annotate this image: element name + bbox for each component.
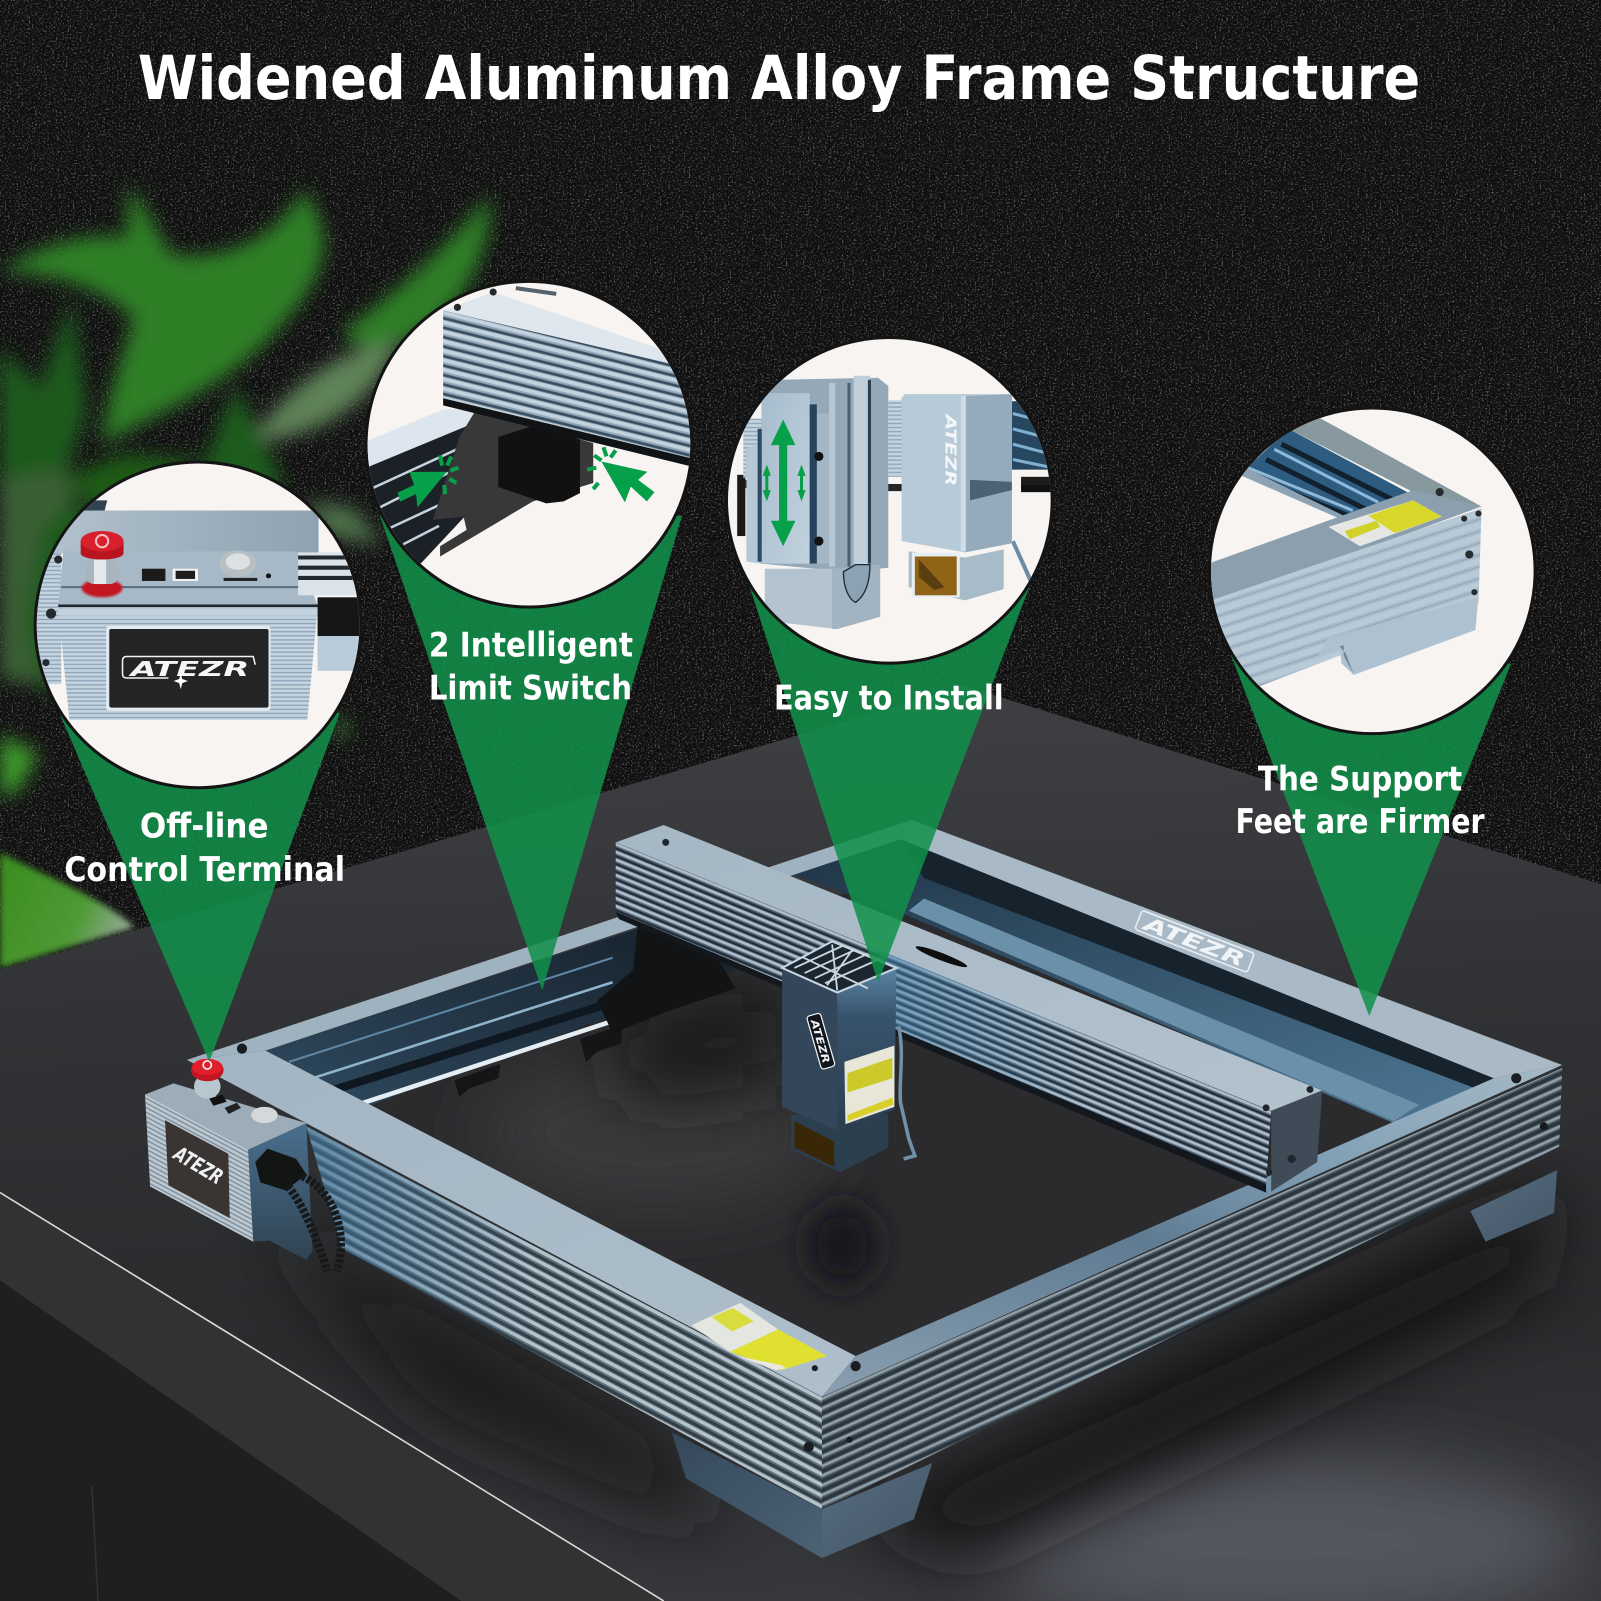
- bottom-left blurred leaf: [0, 853, 135, 968]
- table front face: [0, 1193, 664, 1601]
- module warning label: [844, 1046, 894, 1124]
- small green double arrow right: [797, 465, 806, 501]
- beam ribbed face: [443, 310, 705, 462]
- orange lens: [912, 552, 960, 597]
- left green pointer: [398, 455, 458, 507]
- black bar left: [737, 474, 746, 536]
- panel: limit switch detail: [365, 280, 705, 609]
- motor mounting plate: [433, 408, 593, 556]
- black logo panel: [106, 626, 271, 711]
- right module logo: ATEZR: [941, 413, 959, 486]
- green callout beams: [59, 516, 1511, 1062]
- label: 2 intelligent limit switch: 2 Intelligent: [429, 626, 633, 665]
- label: off-line control terminal: [64, 806, 345, 889]
- beam: limit switch: [380, 516, 682, 990]
- small green double arrow left: [763, 465, 771, 501]
- panel: off-line control terminal detail: [31, 460, 370, 789]
- blue channel: [1240, 429, 1413, 522]
- label: off-line control terminal: Control Terminal: [64, 850, 345, 889]
- ribbed side face: [1205, 508, 1482, 689]
- left module front plate: [762, 393, 810, 564]
- left module housing: [761, 376, 888, 572]
- left ribbed side face: [306, 1126, 822, 1509]
- label yellow strip: [1345, 521, 1380, 539]
- module left face: [782, 968, 837, 1130]
- left module lower body: [765, 565, 880, 629]
- warning label on frame: [691, 1303, 827, 1370]
- air pipe tip: [843, 565, 870, 602]
- ethernet and usb ports: [142, 569, 198, 581]
- power button: [220, 550, 271, 581]
- air assist wire: [899, 1026, 915, 1159]
- beam: support feet: [1230, 653, 1511, 1016]
- corner screws: [1436, 488, 1482, 595]
- frame strip left: [36, 552, 62, 684]
- blurred green plant: [0, 186, 490, 794]
- ports: [209, 1095, 278, 1123]
- rail light top: [367, 409, 480, 468]
- laser module: [782, 941, 915, 1172]
- left rail channel: [265, 904, 735, 1108]
- frame screws: [42, 555, 62, 666]
- title: Widened Aluminum Alloy Frame Structure: [138, 44, 1420, 114]
- frame brand logo: ATEZR: [1138, 911, 1248, 972]
- laser machine: [145, 820, 1562, 1558]
- panel: easy to install detail: [725, 336, 1056, 665]
- table top: [0, 686, 1601, 1601]
- stripes behind modules: [888, 400, 903, 477]
- right module lower body: [909, 549, 1004, 600]
- connecting bar: [888, 484, 902, 492]
- label: support feet: Feet are Firmer: [1235, 802, 1485, 841]
- dark corner strip: [84, 500, 108, 512]
- label: support feet: [1235, 759, 1485, 841]
- frame brand logo: [1134, 910, 1255, 974]
- right support foot: [1470, 1170, 1557, 1242]
- box face: [145, 1095, 253, 1242]
- front support foot: [672, 1433, 932, 1558]
- big green double arrow: [771, 420, 795, 546]
- module right face: [837, 968, 896, 1130]
- background: dark textured wall: [0, 0, 1601, 1021]
- power plug: [255, 1149, 306, 1191]
- emergency stop button: [81, 531, 124, 597]
- control panel plate: [58, 551, 319, 609]
- box logo: ATEZR: [168, 1141, 227, 1189]
- right green pointer: [587, 447, 654, 502]
- coiled cable: [288, 1176, 341, 1271]
- frame bolts: [237, 1044, 1548, 1452]
- left module side lip: [746, 441, 762, 564]
- module logo: [806, 1013, 835, 1070]
- beam: easy to install: [746, 577, 1033, 982]
- box face stripes: [58, 609, 318, 720]
- module lower body: [791, 1114, 888, 1172]
- module logo: ATEZR: [808, 1017, 831, 1065]
- logo spark: [174, 674, 188, 689]
- beam screws: [454, 286, 557, 311]
- logo outline: [123, 657, 255, 678]
- support foot: [1317, 597, 1478, 675]
- label: 2 intelligent limit switch: Limit Switch: [429, 668, 632, 707]
- warning label: [1328, 500, 1442, 546]
- lens window: [794, 1121, 834, 1167]
- frame top surface: [1203, 490, 1482, 604]
- gantry x-axis beam: [616, 825, 1322, 1193]
- emergency stop button: [191, 1059, 224, 1099]
- beam: off-line control terminal: [59, 713, 340, 1062]
- top plate: [31, 511, 319, 553]
- logo text: ATEZR: [127, 657, 249, 681]
- y-axis stepper motor: [597, 922, 735, 1033]
- bellows cable: [1012, 401, 1056, 582]
- table lighting and shadows: [255, 868, 1583, 1601]
- chrome rail: [369, 426, 466, 564]
- box side: [248, 1123, 312, 1260]
- label: easy to install: Easy to Install: [774, 679, 1004, 718]
- frame top surfaces: [187, 820, 1562, 1397]
- black logo panel: [165, 1120, 230, 1218]
- label: support feet: The Support: [1258, 759, 1462, 798]
- back rail top: [1289, 417, 1482, 506]
- label: 2 intelligent limit switch: [429, 626, 633, 707]
- control box: [145, 1059, 341, 1271]
- box top: [145, 1083, 306, 1150]
- right ribbed side face: [822, 1068, 1562, 1509]
- chrome rails on right: [298, 552, 360, 671]
- module fan grille: [782, 941, 896, 992]
- back rail channel: [791, 839, 1494, 1123]
- panel: support feet detail: [1203, 406, 1537, 735]
- stepper motor: [498, 427, 580, 503]
- right module body: [902, 394, 1012, 552]
- label: off-line control terminal: Off-line: [140, 806, 269, 845]
- beam top surface: [444, 293, 668, 363]
